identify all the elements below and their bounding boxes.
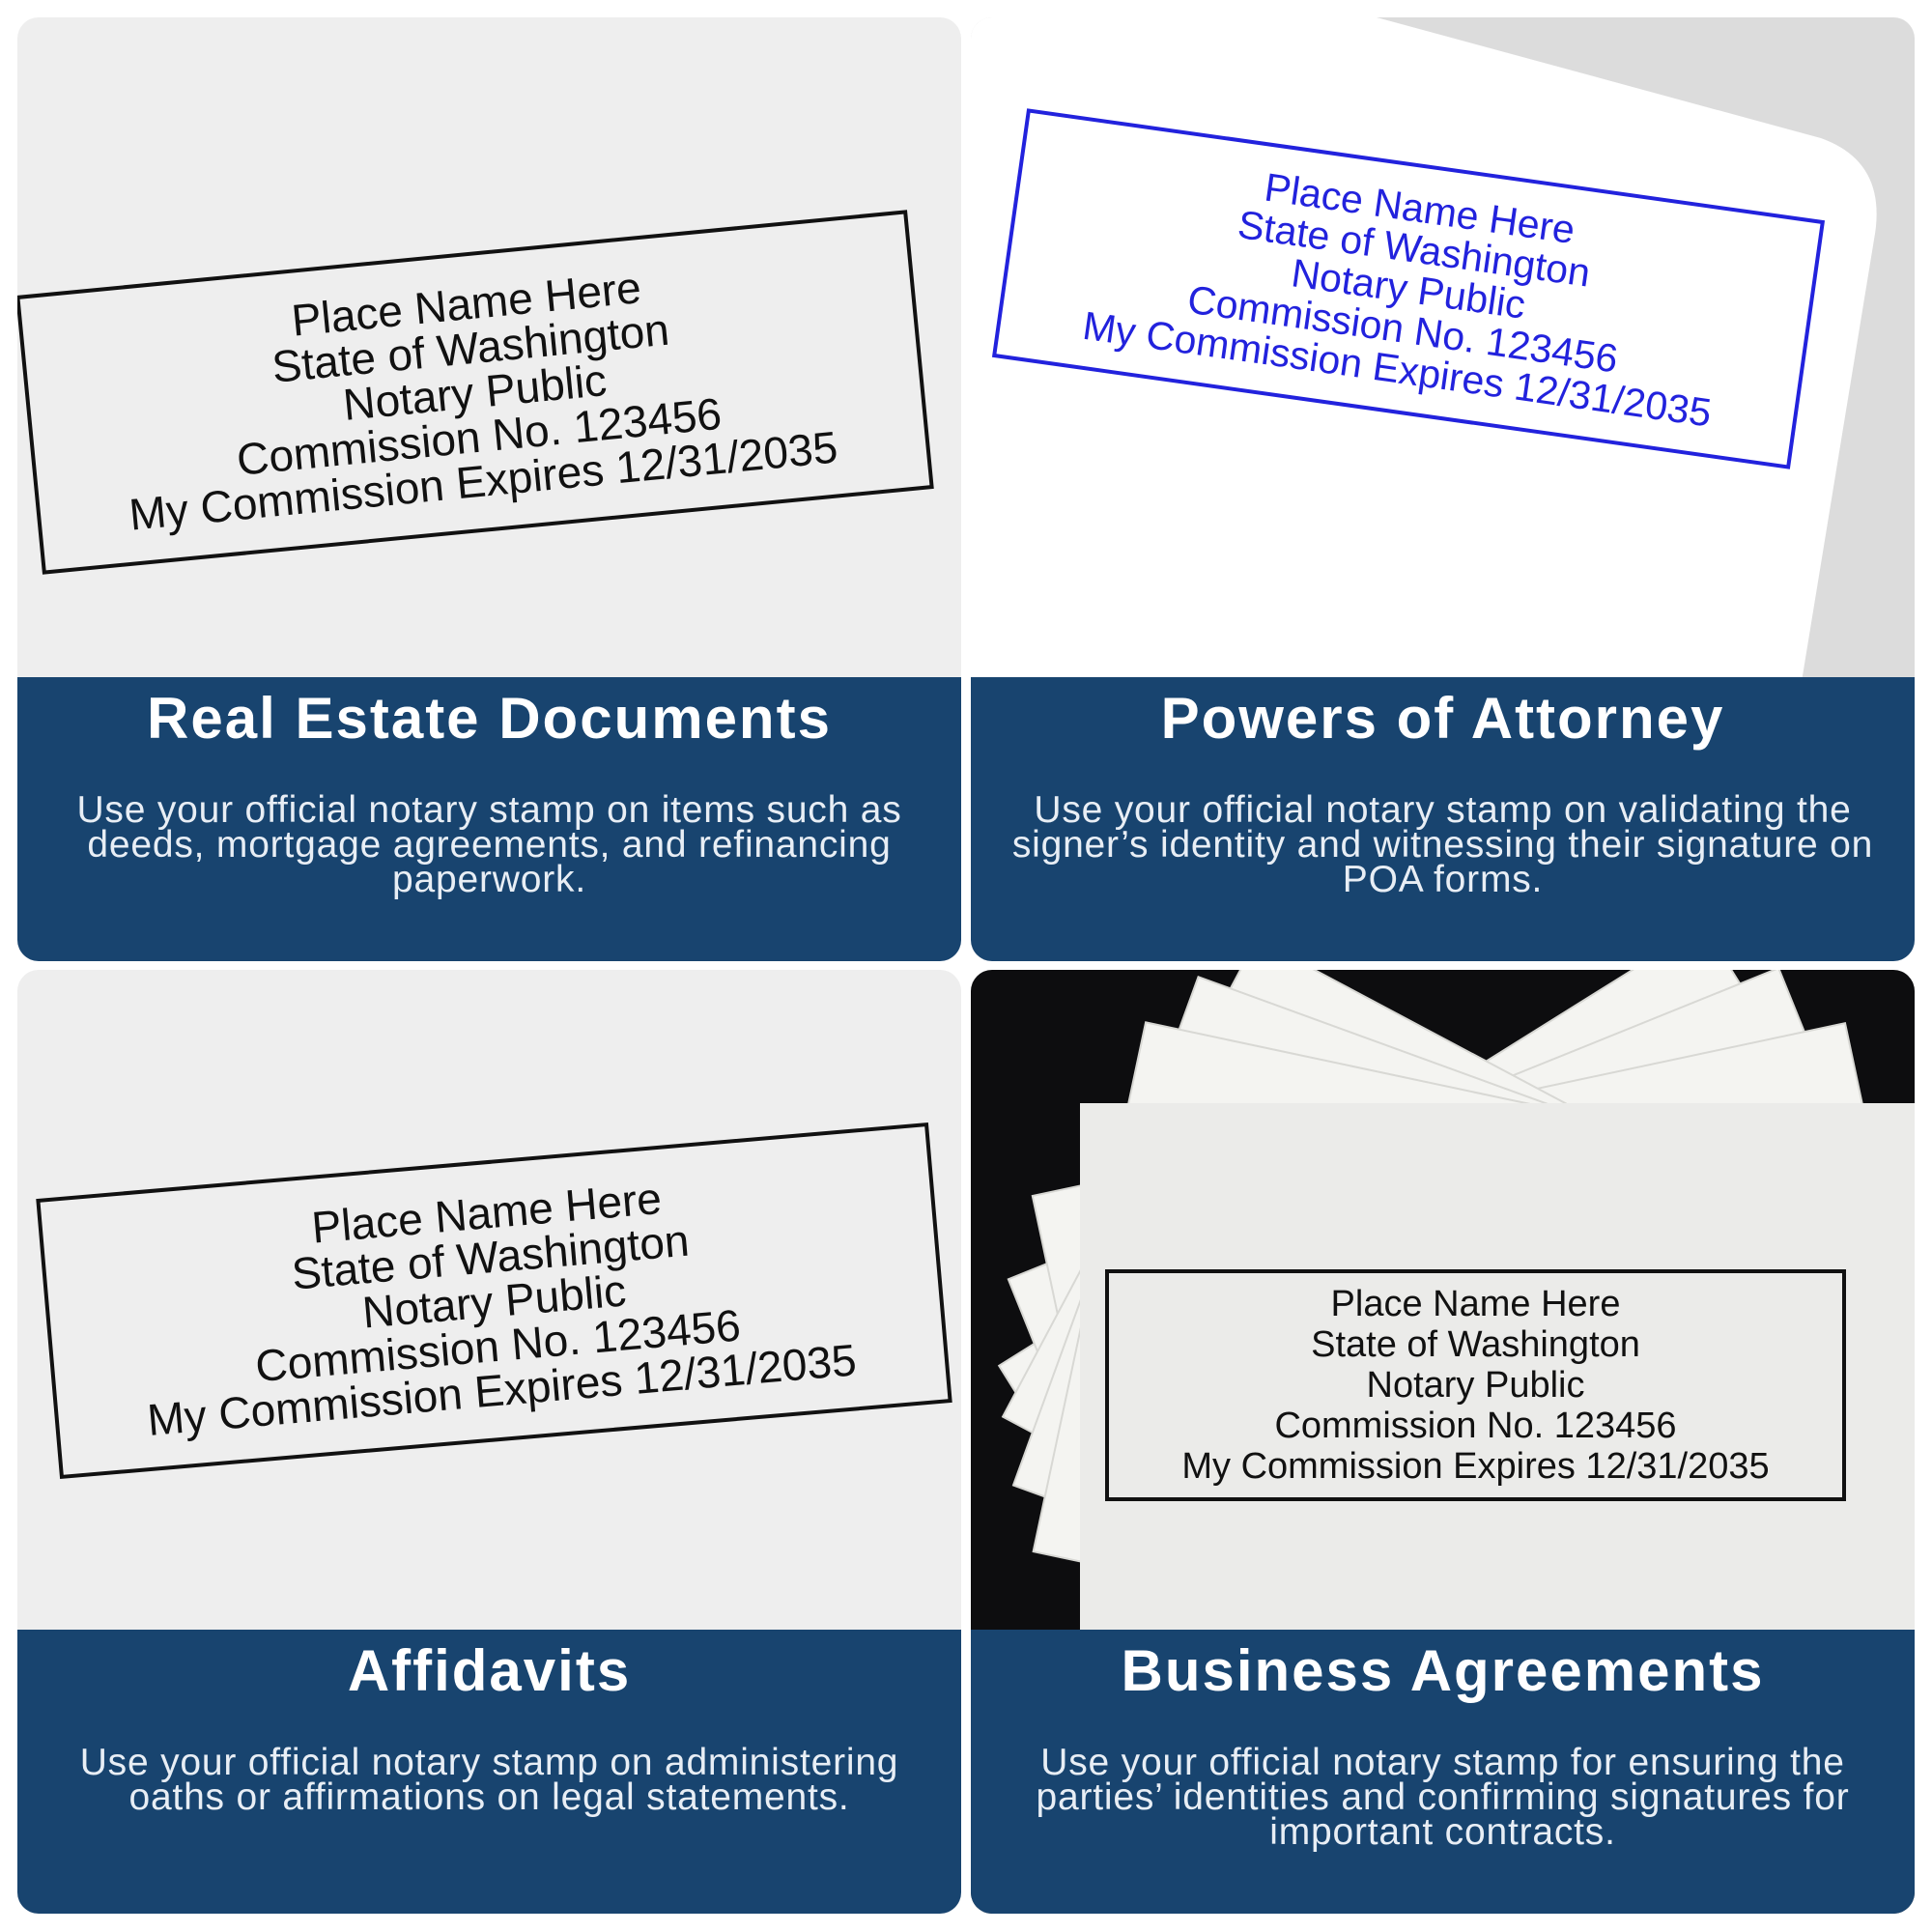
stamp impression blue: My Commission Expires 12/31/2035: [1080, 303, 1714, 436]
caption band: parties’ identities and confirming signatures for: [1036, 1776, 1849, 1818]
stamp impression straight: My Commission Expires 12/31/2035: [1181, 1446, 1770, 1487]
stamp impression blue: State of Washington: [1236, 202, 1593, 296]
caption band: paperwork.: [392, 859, 586, 900]
caption band: POA forms.: [1343, 859, 1543, 900]
caption band: Use your official notary stamp on administering: [80, 1742, 898, 1783]
stamp impression straight: Commission No. 123456: [1274, 1406, 1677, 1446]
caption band: [17, 677, 961, 961]
caption band: Use your official notary stamp on validating the: [1034, 789, 1852, 831]
stamp impression black: My Commission Expires 12/31/2035: [127, 421, 839, 540]
panel: affidavits: [17, 970, 961, 1914]
caption band: [971, 1630, 1915, 1914]
stamp impression black: Place Name Here: [310, 1172, 664, 1252]
stamp impression black: Notary Public: [341, 355, 609, 430]
caption band: [17, 1630, 961, 1914]
caption band: Real Estate Documents: [147, 686, 832, 751]
stamp impression black: Commission No. 123456: [235, 388, 724, 485]
caption band: Affidavits: [348, 1638, 631, 1703]
stamp impression black: Place Name Here: [289, 262, 643, 346]
caption band: Business Agreements: [1121, 1638, 1764, 1703]
caption band: signer’s identity and witnessing their signature on: [1012, 824, 1873, 866]
stamp impression straight: Notary Public: [1366, 1365, 1584, 1406]
paper sheet: [971, 17, 1877, 677]
fanned papers: [997, 970, 1915, 1630]
caption band: Use your official notary stamp on items such as: [76, 789, 902, 831]
panel: business agreements: [971, 970, 1915, 1914]
caption band: Use your official notary stamp for ensuring the: [1040, 1742, 1845, 1783]
stamp impression black: My Commission Expires 12/31/2035: [145, 1334, 858, 1445]
stamp impression black: State of Washington: [290, 1214, 691, 1298]
stamp impression straight: State of Washington: [1311, 1324, 1640, 1365]
caption band: Powers of Attorney: [1161, 686, 1724, 751]
panel: real estate documents: [17, 17, 961, 961]
caption band: oaths or affirmations on legal statements.: [128, 1776, 850, 1818]
stamp impression black: [15, 210, 934, 575]
stamp impression straight: [1105, 1269, 1846, 1501]
stamp impression black: State of Washington: [270, 304, 671, 392]
stamp impression straight: Place Name Here: [1331, 1284, 1620, 1324]
stamp impression blue: Commission No. 123456: [1185, 277, 1621, 382]
stamp impression blue: [992, 108, 1825, 469]
stamp impression blue: Place Name Here: [1262, 165, 1577, 252]
stamp impression blue: Notary Public: [1289, 250, 1528, 327]
stamp impression black: Commission No. 123456: [253, 1299, 743, 1391]
panel: powers of attorney: [971, 17, 1915, 961]
caption band: deeds, mortgage agreements, and refinancing: [87, 824, 892, 866]
stamp impression black: [36, 1122, 952, 1479]
caption band: [971, 677, 1915, 961]
caption band: important contracts.: [1269, 1811, 1616, 1853]
stamp impression black: Notary Public: [360, 1264, 628, 1337]
